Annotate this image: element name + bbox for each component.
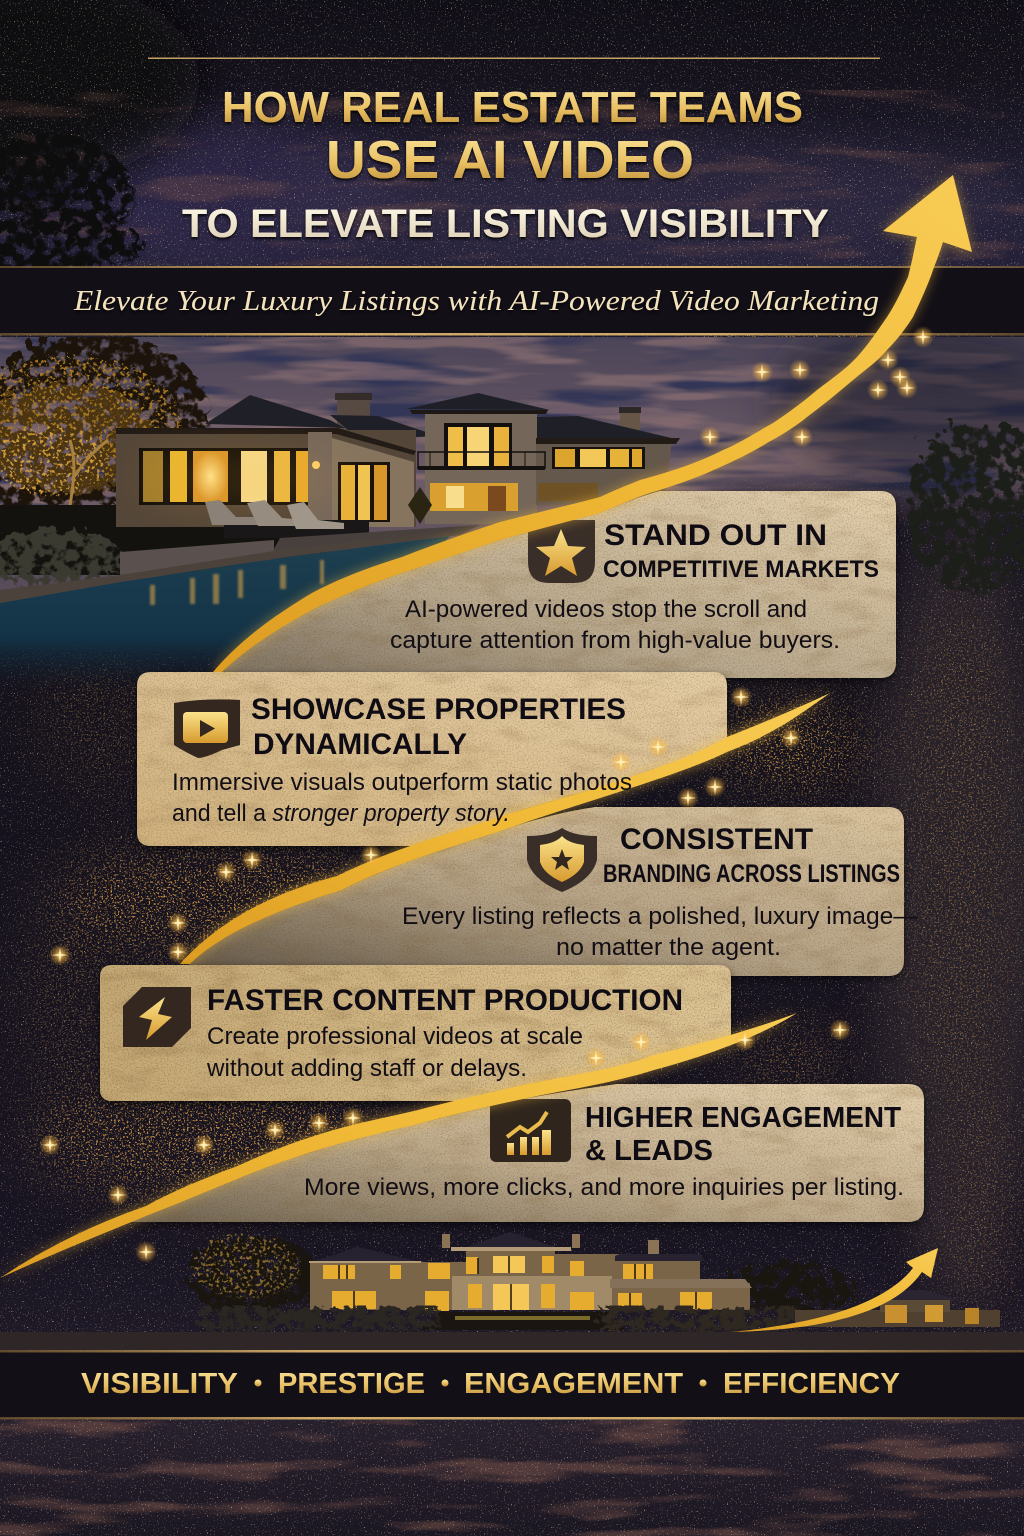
small gold arrow xyxy=(731,1248,938,1332)
heading xyxy=(603,823,900,888)
heading: COMPETITIVE MARKETS xyxy=(603,556,879,583)
tree silhouette right xyxy=(907,425,1024,595)
porch xyxy=(308,432,414,527)
roofs xyxy=(205,393,680,440)
lower tower windows xyxy=(408,483,518,524)
mansion roofs xyxy=(308,1232,705,1263)
body text: Immersive visuals outperform static photos xyxy=(172,769,632,796)
center tower wall xyxy=(425,412,537,524)
icon: badge shield xyxy=(527,828,597,892)
right wing wall xyxy=(536,440,672,505)
heading: SHOWCASE PROPERTIES xyxy=(251,693,626,726)
terrace steps xyxy=(420,1312,625,1330)
bottom keyword band xyxy=(0,1350,1024,1420)
card 3: consistent branding across listings xyxy=(175,805,918,977)
arrow 3: long gold swoosh xyxy=(0,1013,797,1278)
body text: capture attention from high-value buyers. xyxy=(390,627,840,654)
heading xyxy=(585,1102,901,1167)
body text: Create professional videos at scale xyxy=(207,1023,583,1050)
gold dust around arrows xyxy=(0,334,1024,1332)
bottom mansion xyxy=(0,1232,1024,1350)
tree silhouette upper left xyxy=(0,135,145,275)
deck xyxy=(274,525,480,551)
arrow 2: lower gold swoosh xyxy=(180,693,830,964)
card 4: faster content production xyxy=(100,965,731,1101)
heading: CONSISTENT xyxy=(620,823,813,856)
card 2: showcase properties dynamically xyxy=(137,672,830,964)
heading xyxy=(251,693,626,761)
main wing walls xyxy=(116,430,416,527)
mansion central block xyxy=(452,1276,612,1310)
keywords: EFFICIENCY xyxy=(723,1368,900,1400)
body text: AI-powered videos stop the scroll and xyxy=(405,596,807,623)
body text: More views, more clicks, and more inquiries per listing. xyxy=(304,1174,904,1201)
keywords xyxy=(81,1368,900,1400)
shrubs xyxy=(200,1308,800,1332)
keywords: ENGAGEMENT xyxy=(464,1368,683,1400)
top gold rule xyxy=(148,58,880,59)
heading xyxy=(603,519,879,583)
keywords: VISIBILITY xyxy=(81,1368,238,1400)
body text xyxy=(206,1023,583,1082)
ground strip xyxy=(0,1332,1024,1350)
shrubs xyxy=(0,530,125,590)
upper tower window and balcony xyxy=(418,423,545,470)
heading: FASTER CONTENT PRODUCTION xyxy=(207,984,683,1017)
mansion windows xyxy=(323,1256,712,1311)
body text xyxy=(390,596,840,654)
small guest house xyxy=(795,1290,1000,1327)
retaining wall xyxy=(120,540,274,575)
tagline: Elevate Your Luxury Listings with AI-Powered Video Marketing xyxy=(73,286,879,317)
hedge xyxy=(0,505,330,575)
chimney right xyxy=(619,407,641,430)
mansion cornices xyxy=(309,1247,752,1288)
scene: luxury house at dusk with pool xyxy=(0,320,1024,692)
chimneys xyxy=(442,1234,659,1254)
body text: Every listing reflects a polished, luxury image— xyxy=(402,903,918,930)
trees behind mansion xyxy=(190,1236,860,1320)
gold sparkles xyxy=(39,326,934,1263)
title: HOW REAL ESTATE TEAMS xyxy=(222,83,803,132)
icon: growth chart xyxy=(490,1099,571,1162)
mansion body xyxy=(310,1250,750,1310)
right windows xyxy=(538,447,645,501)
window mullions xyxy=(339,1256,696,1310)
icon: lightning bolt xyxy=(123,987,191,1047)
card 1: stand out in competitive markets xyxy=(200,490,900,680)
chimney left xyxy=(335,393,372,430)
body text: no matter the agent. xyxy=(556,934,781,961)
title: USE AI VIDEO xyxy=(326,130,694,190)
loungers xyxy=(205,500,369,538)
icon: star shield xyxy=(528,520,595,583)
heading: DYNAMICALLY xyxy=(253,728,467,761)
card 5: higher engagement and leads xyxy=(125,1083,925,1223)
heading: STAND OUT IN xyxy=(604,519,827,552)
body text: without adding staff or delays. xyxy=(206,1055,527,1082)
heading: BRANDING ACROSS LISTINGS xyxy=(603,860,900,888)
keywords: PRESTIGE xyxy=(278,1368,425,1400)
icon: play button xyxy=(174,699,240,758)
title: TO ELEVATE LISTING VISIBILITY xyxy=(182,202,829,246)
body text xyxy=(172,769,632,827)
golden tree behind house xyxy=(0,337,212,505)
main rising gold arrow xyxy=(213,175,972,672)
body text xyxy=(402,903,918,961)
glow around house xyxy=(140,448,340,508)
body text: and tell a stronger property story. xyxy=(172,800,510,827)
pool water xyxy=(0,536,450,682)
tagline band with gold rules xyxy=(0,266,1024,336)
large windows left xyxy=(139,448,309,505)
title xyxy=(182,83,829,246)
heading: HIGHER ENGAGEMENT xyxy=(585,1102,901,1134)
heading: & LEADS xyxy=(585,1135,713,1167)
